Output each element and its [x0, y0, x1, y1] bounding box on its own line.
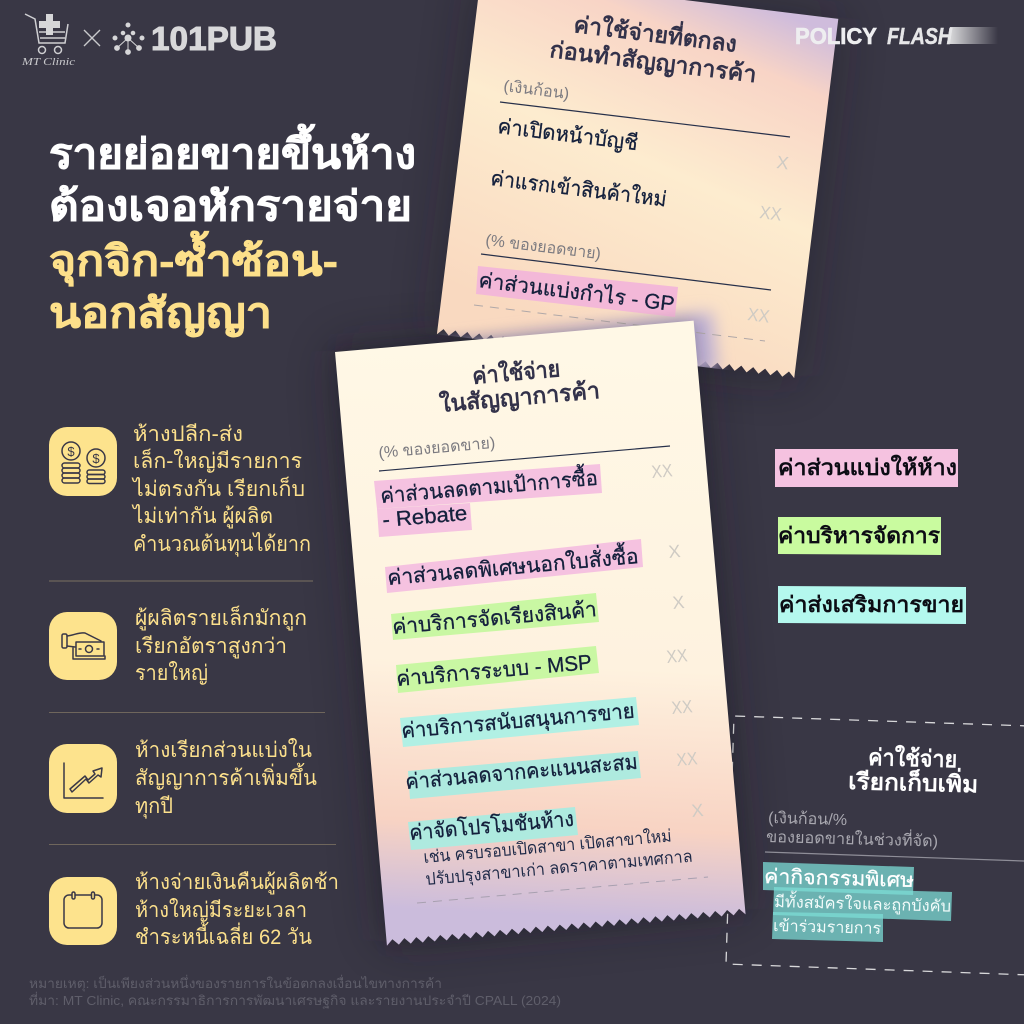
- legend: management fees: [778, 517, 941, 555]
- heading: in-contract costs: [438, 354, 601, 418]
- icon: MT Clinic cart: [25, 14, 68, 54]
- POLICY FLASH mark: FLASH: [887, 23, 952, 49]
- text block: ไม่ตรงกัน เรียกเก็บ: [131, 475, 305, 501]
- item 1: coins: [49, 423, 311, 557]
- heading: pre-contract costs: ก่อนทำสัญญาการค้า: [548, 36, 758, 88]
- row: rebate: XX: [651, 460, 673, 482]
- row: merchandising fee: ค่าบริการจัดเรียงสินค้า: [391, 598, 598, 639]
- row: MSP: ค่าบริการระบบ - MSP: [395, 651, 593, 691]
- footnote and source: หมายเหตุ: เป็นเพียงส่วนหนึ่งของรายการในข้อตกลงเงื่อนไขทางการค้า: [29, 974, 442, 992]
- text block: คำนวณต้นทุนได้ยาก: [133, 532, 311, 557]
- item 2: hand and cash: [49, 604, 307, 685]
- POLICY FLASH mark: POLICY: [795, 23, 877, 49]
- icon: coins: $: [92, 451, 100, 466]
- heading: in-contract costs: ในสัญญาการค้า: [438, 376, 601, 418]
- row: store promotion: ปรับปรุงสาขาเก่า ลดราคาตามเทศกาล: [425, 847, 693, 890]
- title: ต้องเจอหักรายจ่าย: [49, 183, 412, 229]
- highlighted special activity: เข้าร่วมรายการ: [773, 917, 882, 938]
- panel: pre-contract receipt: [436, 0, 838, 378]
- row: special discount: X: [668, 541, 681, 562]
- row: loyalty points: ค่าส่วนลดจากคะแนนสะสม: [404, 751, 639, 794]
- title: จุกจิก-ซ้ำซ้อน-: [49, 231, 338, 287]
- icon: coins: [49, 427, 117, 496]
- heading: pre-contract costs: [548, 7, 758, 88]
- percent of sales section: ค่าส่วนแบ่งกำไร - GP: [477, 268, 676, 316]
- icon: chart arrow: [49, 744, 117, 813]
- row: sales support: XX: [671, 696, 693, 718]
- legend: [775, 449, 966, 624]
- legend: retailer share: ค่าส่วนแบ่งให้ห้าง: [778, 454, 957, 480]
- lump sum section: XX: [759, 202, 783, 225]
- unit note: (เงินก้อน/%: [768, 809, 847, 829]
- row: MSP: XX: [666, 645, 688, 667]
- text block: ไม่เท่ากัน ผู้ผลิต: [131, 504, 273, 529]
- row: sales support: ค่าบริการสนับสนุนการขาย: [400, 700, 636, 744]
- text block: เรียกอัตราสูงกว่า: [135, 635, 287, 659]
- POLICY FLASH mark: [795, 23, 998, 49]
- legend: management fees: ค่าบริหารจัดการ: [778, 523, 940, 548]
- title: [49, 124, 416, 337]
- icon: calendar: [49, 877, 117, 945]
- text block: ห้างจ่ายเงินคืนผู้ผลิตช้า: [135, 871, 339, 895]
- panel: in-contract receipt: [335, 321, 746, 946]
- text block: ห้างปลีก-ส่ง: [133, 423, 243, 446]
- text block: [135, 738, 317, 819]
- row: rebate: - Rebate: [381, 502, 468, 532]
- heading: additional charges: [848, 743, 979, 797]
- highlighted special activity: [763, 862, 952, 942]
- text block: สัญญาการค้าเพิ่มขึ้น: [135, 763, 317, 790]
- logos: MT Clinic x 101PUB: [21, 14, 277, 68]
- row: store promotion: [408, 800, 708, 903]
- item 3: rising chart: [49, 738, 317, 819]
- text block: รายใหญ่: [135, 661, 208, 685]
- lump sum section: X: [776, 152, 790, 173]
- unit note: ของยอดขายในช่วงที่จัด): [766, 825, 938, 851]
- dashed panel outline: additional charges: [726, 716, 1024, 975]
- row: store promotion: เช่น ครบรอบเปิดสาขา เปิดสาขาใหม่: [423, 825, 672, 867]
- percent of sales section: XX: [747, 304, 771, 327]
- logo text: MT Clinic: MT Clinic: [21, 57, 75, 68]
- title: รายย่อยขายขึ้นห้าง: [49, 124, 416, 177]
- text block: ห้างใหญ่มีระยะเวลา: [135, 898, 307, 922]
- highlighted special activity: มีทั้งสมัครใจและถูกบังคับ: [774, 890, 951, 917]
- item 4: calendar: [49, 871, 339, 949]
- row: store promotion: ค่าจัดโปรโมชันห้าง: [408, 807, 575, 845]
- percent of sales section: (% ของยอดขาย): [485, 232, 602, 263]
- row: rebate: [374, 460, 673, 537]
- highlighted special activity: ค่ากิจกรรมพิเศษ: [764, 866, 914, 892]
- lump sum section: [489, 77, 790, 225]
- lump sum section: ค่าแรกเข้าสินค้าใหม่: [489, 166, 668, 212]
- text block: ห้างเรียกส่วนแบ่งใน: [135, 738, 312, 762]
- row: special discount: ค่าส่วนลดพิเศษนอกใบสั่งซื้อ: [386, 541, 639, 590]
- percent of sales section: [474, 232, 771, 341]
- text block: เล็ก-ใหญ่มีรายการ: [133, 447, 302, 473]
- percent of sales header: (% ของยอดขาย): [378, 435, 496, 462]
- legend: promotion fees: [778, 586, 966, 624]
- icon: hand with money: [49, 612, 117, 680]
- lump sum section: (เงินก้อน): [503, 77, 570, 103]
- row: merchandising fee: [391, 592, 685, 640]
- heading: in-contract costs: ค่าใช้จ่าย: [471, 354, 561, 389]
- row: MSP: [395, 645, 688, 693]
- unit note: [765, 809, 1024, 861]
- legend: promotion fees: ค่าส่งเสริมการขาย: [779, 592, 964, 617]
- text block: [135, 604, 307, 685]
- logo text: 101PUB: 101PUB: [151, 20, 277, 57]
- heading: additional charges: เรียกเก็บเพิ่ม: [848, 764, 979, 797]
- row: store promotion: X: [691, 800, 704, 821]
- icon: 101PUB spark: [113, 23, 144, 54]
- legend: retailer share: [775, 449, 958, 487]
- heading: additional charges: ค่าใช้จ่าย: [868, 743, 958, 772]
- row: loyalty points: XX: [676, 748, 698, 770]
- text block: ผู้ผลิตรายเล็กมักถูก: [135, 604, 307, 631]
- footnote and source: ที่มา: MT Clinic, คณะกรรมาธิการการพัฒนาเศรษฐกิจ และรายงานประจำปี CPALL (2024): [29, 992, 561, 1009]
- text block: ชำระหนี้เฉลี่ย 62 วัน: [135, 922, 312, 949]
- panel: additional charges: [763, 743, 1024, 942]
- lump sum section: ค่าเปิดหน้าบัญชี: [496, 115, 639, 155]
- footnote and source: [29, 974, 561, 1009]
- icon: coins: $: [67, 444, 75, 459]
- text block: [131, 423, 311, 557]
- title: นอกสัญญา: [49, 290, 272, 337]
- row: rebate: ค่าส่วนลดตามเป้าการซื้อ: [379, 463, 599, 508]
- row: merchandising fee: X: [672, 592, 685, 613]
- percent of sales header: [378, 435, 670, 471]
- text block: ทุกปี: [135, 795, 173, 819]
- heading: pre-contract costs: ค่าใช้จ่ายที่ตกลง: [572, 7, 739, 57]
- times sign: [84, 30, 100, 46]
- text block: [135, 871, 339, 949]
